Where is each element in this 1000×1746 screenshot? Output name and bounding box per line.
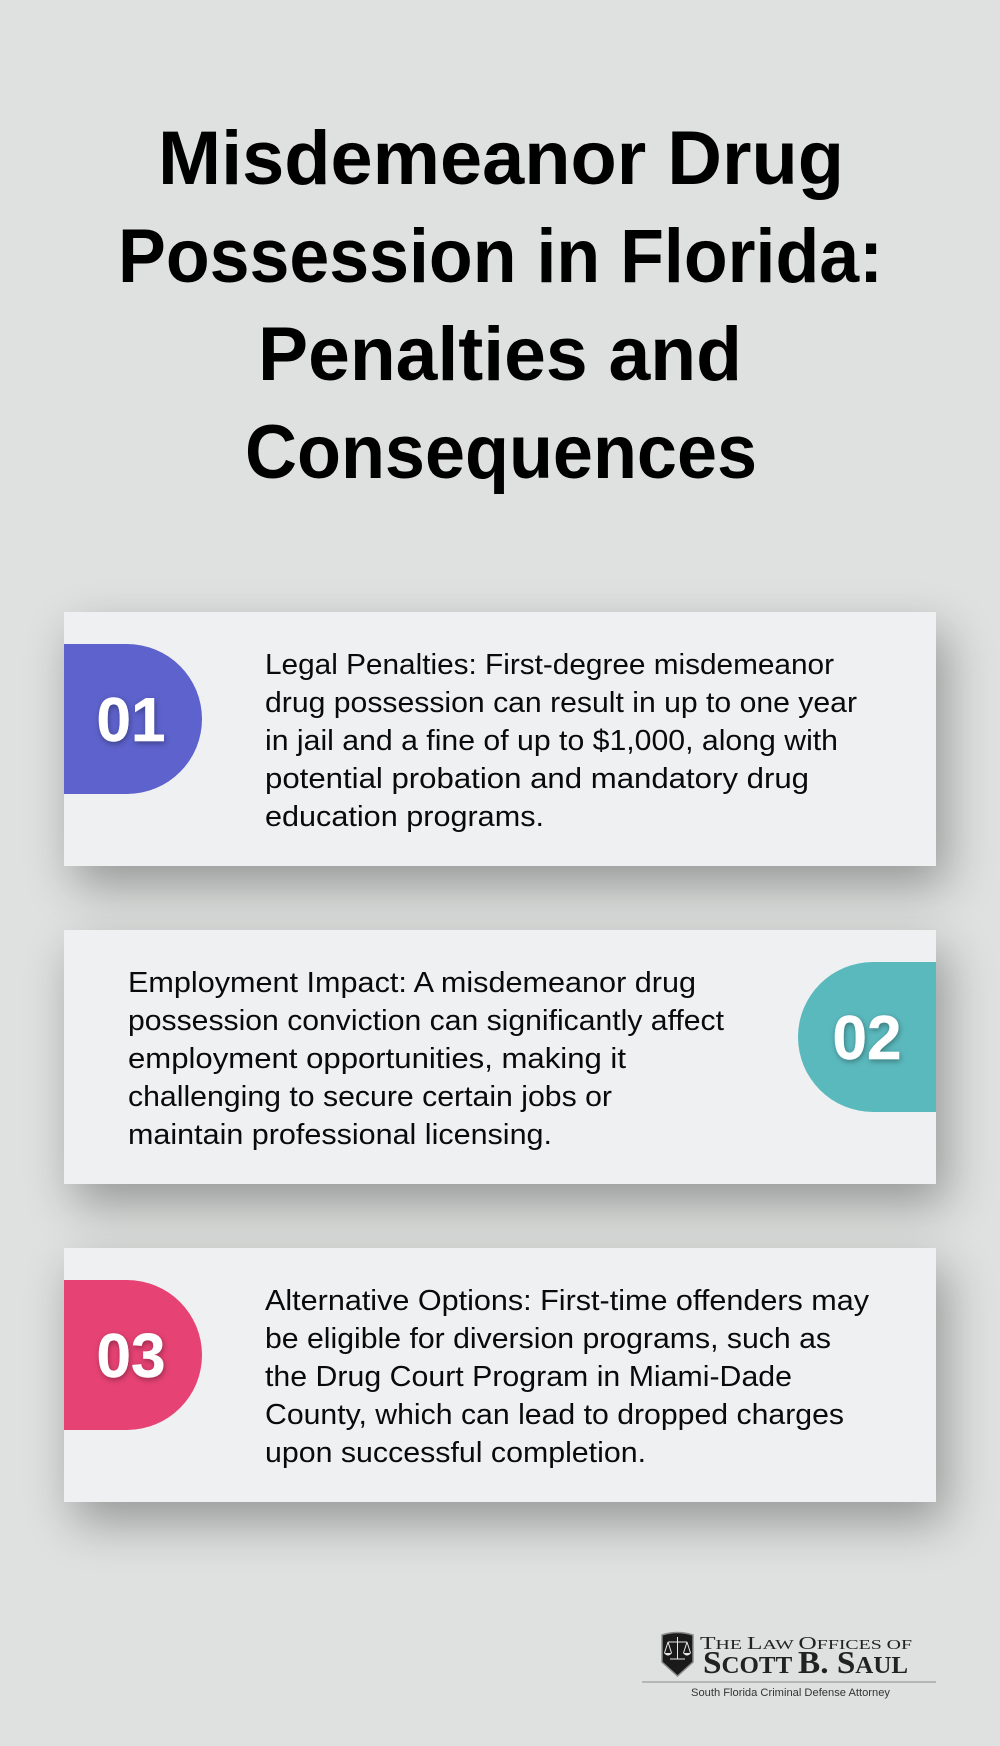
- text: alternative options: be eligible for diversion programs, such as: [265, 1323, 831, 1355]
- badge 01: [64, 644, 202, 794]
- text: employment impact: Employment Impact: A misdemeanor drug: [128, 967, 696, 999]
- text: legal penalties: [265, 649, 857, 833]
- firm name: T HE L AW O FFICES OF: [700, 1633, 912, 1653]
- text: legal penalties: education programs.: [265, 801, 544, 833]
- title: Misdemeanor Drug: [158, 116, 844, 201]
- text: alternative options: [265, 1285, 870, 1469]
- firm name: SCOTT B. SAUL: [703, 1644, 908, 1680]
- badge 01: 01: [97, 686, 165, 755]
- badge 03: [64, 1280, 202, 1430]
- text: employment impact: [128, 967, 724, 1151]
- panel: employment impact card: [64, 930, 936, 1184]
- text: legal penalties: drug possession can result in up to one year: [265, 687, 857, 719]
- text: alternative options: the Drug Court Program in Miami-Dade: [265, 1361, 792, 1393]
- badge 02: 02: [833, 1004, 901, 1073]
- tagline: South Florida Criminal Defense Attorney: [691, 1687, 891, 1699]
- text: legal penalties: potential probation and mandatory drug: [265, 763, 809, 795]
- panel: alternative options card: [64, 1248, 936, 1502]
- text: employment impact: employment opportunities, making it: [128, 1043, 626, 1075]
- title: Penalties and: [258, 312, 742, 397]
- title: Possession in Florida:: [118, 214, 883, 299]
- text: legal penalties: Legal Penalties: First-degree misdemeanor: [265, 649, 834, 681]
- text: alternative options: upon successful completion.: [265, 1437, 646, 1469]
- text: alternative options: Alternative Options: First-time offenders may: [265, 1285, 870, 1317]
- badge 02: [798, 962, 936, 1112]
- text: employment impact: maintain professional licensing.: [128, 1119, 552, 1151]
- title: Consequences: [245, 410, 757, 495]
- text: employment impact: possession conviction can significantly affect: [128, 1005, 724, 1037]
- title: [118, 116, 883, 495]
- text: employment impact: challenging to secure certain jobs or: [128, 1081, 612, 1113]
- badge 03: 03: [97, 1322, 165, 1391]
- text: legal penalties: in jail and a fine of up to $1,000, along with: [265, 725, 838, 757]
- logo: [642, 1632, 936, 1699]
- icon: shield with scales: [662, 1632, 693, 1676]
- panel: legal penalties card: [64, 612, 936, 866]
- text: alternative options: County, which can lead to dropped charges: [265, 1399, 844, 1431]
